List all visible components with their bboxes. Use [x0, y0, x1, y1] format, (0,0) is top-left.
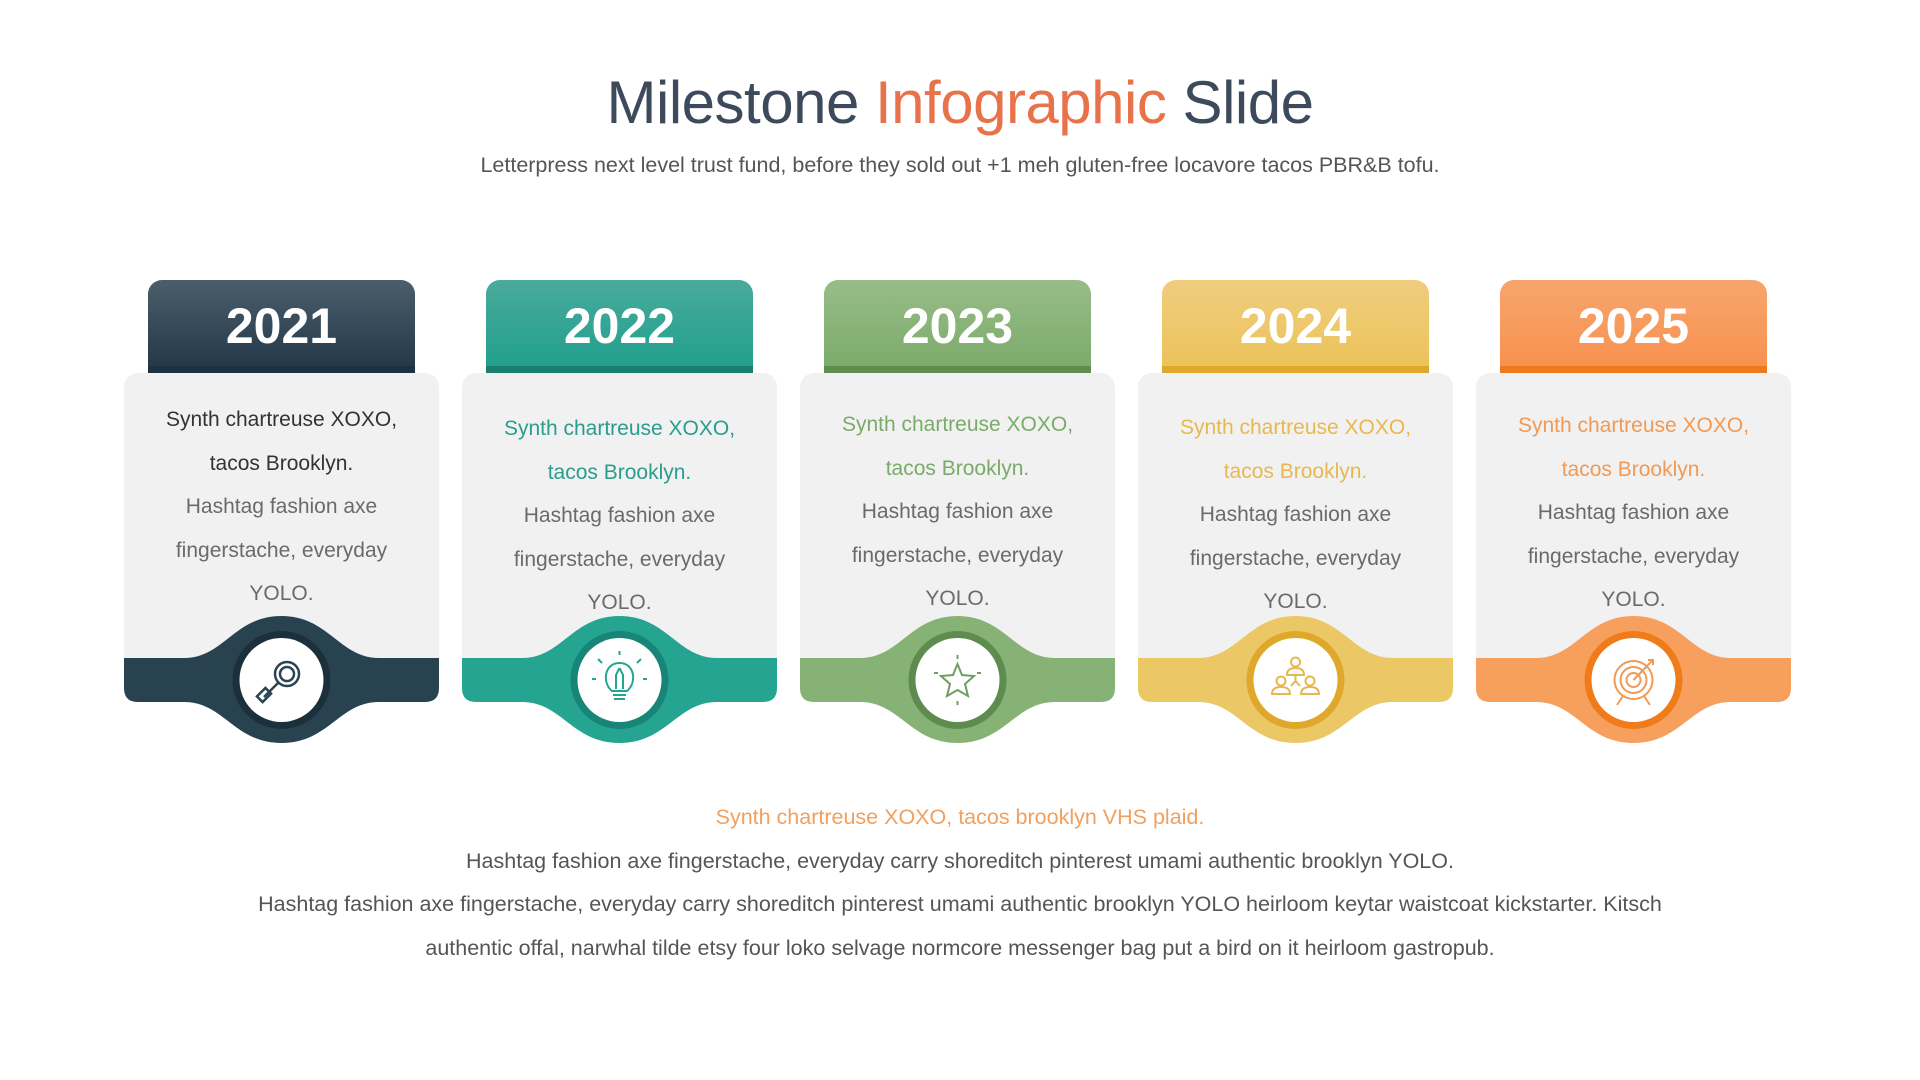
year header 2025: 2025: [1578, 298, 1689, 354]
card text 2024: fingerstache, everyday: [1190, 546, 1401, 570]
card: 2023: [800, 280, 1115, 743]
year header 2022: 2022: [564, 298, 675, 354]
card text 2025: YOLO.: [1601, 588, 1666, 611]
card text 2021: YOLO.: [249, 582, 314, 605]
card body 2022: [462, 373, 777, 743]
year header 2023: [824, 280, 1091, 373]
card text 2021: tacos Brooklyn.: [210, 452, 353, 474]
card text 2022: tacos Brooklyn.: [548, 460, 691, 484]
card body 2023: [800, 373, 1115, 743]
year header 2024: 2024: [1240, 298, 1351, 354]
card text 2023: Hashtag fashion axe: [862, 500, 1053, 523]
card text 2024: YOLO.: [1263, 590, 1328, 613]
card: 2024: [1138, 280, 1453, 743]
footer text: [258, 805, 1662, 960]
card body 2025: [1476, 373, 1791, 743]
card text 2023: Synth chartreuse XOXO,: [842, 413, 1073, 436]
card: 2025: [1476, 280, 1791, 743]
title: Milestone Infographic Slide: [607, 69, 1313, 136]
card text 2024: tacos Brooklyn.: [1224, 460, 1367, 482]
card: 2021: [124, 280, 439, 743]
card text 2022: Synth chartreuse XOXO,: [504, 417, 735, 440]
footer text: Synth chartreuse XOXO, tacos brooklyn VHS plaid.: [716, 805, 1204, 829]
footer text: authentic offal, narwhal tilde etsy four loko selvage normcore messenger bag put a bird on it heirloom gastropub.: [425, 936, 1495, 960]
card text 2022: [504, 417, 735, 614]
card text 2023: tacos Brooklyn.: [886, 456, 1029, 480]
card text 2022: Hashtag fashion axe: [524, 504, 715, 527]
card text 2024: Hashtag fashion axe: [1200, 503, 1391, 526]
card text 2023: YOLO.: [925, 587, 990, 610]
subtitle: Letterpress next level trust fund, before they sold out +1 meh gluten-free locavore tacos PBR&B tofu.: [480, 153, 1440, 177]
card text 2025: fingerstache, everyday: [1528, 544, 1739, 568]
card text 2021: Hashtag fashion axe: [186, 495, 377, 518]
card text 2023: [842, 413, 1073, 610]
card text 2025: Synth chartreuse XOXO,: [1518, 414, 1749, 437]
card body 2021: [124, 373, 439, 743]
card body 2024: [1138, 373, 1453, 743]
footer text: Hashtag fashion axe fingerstache, everyday carry shoreditch pinterest umami authentic brooklyn YOLO heirloom keytar waistcoat kickstarter. Kitsch: [258, 892, 1662, 916]
year header 2024: [1162, 280, 1429, 373]
card text 2021: Synth chartreuse XOXO,: [166, 408, 397, 431]
card text 2025: tacos Brooklyn.: [1562, 458, 1705, 480]
card text 2023: fingerstache, everyday: [852, 544, 1063, 566]
footer text: Hashtag fashion axe fingerstache, everyday carry shoreditch pinterest umami authentic brooklyn YOLO.: [466, 848, 1454, 872]
card text 2022: fingerstache, everyday: [514, 548, 725, 570]
card text 2025: Hashtag fashion axe: [1538, 501, 1729, 524]
card text 2022: YOLO.: [587, 591, 652, 614]
year header 2021: 2021: [226, 298, 337, 354]
year header 2023: 2023: [902, 298, 1013, 354]
card text 2021: fingerstache, everyday: [176, 538, 387, 562]
card: 2022: [462, 280, 777, 743]
card text 2021: [166, 408, 397, 605]
year header 2025: [1500, 280, 1767, 373]
card text 2025: [1518, 414, 1749, 611]
year header 2021: [148, 280, 415, 373]
card text 2024: Synth chartreuse XOXO,: [1180, 416, 1411, 439]
card text 2024: [1180, 416, 1411, 613]
year header 2022: [486, 280, 753, 373]
